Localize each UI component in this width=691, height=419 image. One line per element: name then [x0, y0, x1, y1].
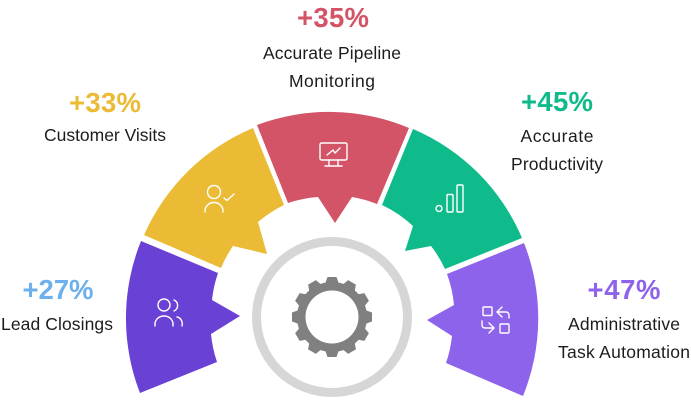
icon: automation swap — [482, 307, 509, 333]
segment: task automation — [427, 243, 538, 396]
stat: pipeline monitoring: Monitoring — [289, 71, 375, 91]
stat: customer visits — [44, 87, 166, 145]
stat: task automation: +47% — [588, 274, 660, 305]
icon: user check — [205, 186, 234, 212]
stat: task automation: Administrative — [568, 314, 680, 334]
segment: pipeline monitoring — [257, 112, 409, 223]
icon: users — [155, 299, 182, 326]
stat: productivity: Productivity — [511, 154, 603, 174]
stat: pipeline monitoring — [263, 2, 401, 91]
stat: lead closings: Lead Closings — [1, 314, 113, 334]
icon: monitor — [320, 143, 347, 166]
center ring — [256, 242, 408, 392]
gear icon — [292, 277, 372, 357]
stat: productivity — [511, 86, 603, 174]
stat: lead closings: +27% — [22, 274, 94, 305]
stat: lead closings — [1, 274, 113, 334]
stat: productivity: Accurate — [520, 126, 594, 146]
icon: bar signal — [436, 185, 463, 212]
stat: pipeline monitoring: +35% — [297, 2, 369, 33]
stat: customer visits: +33% — [69, 87, 141, 118]
segment: productivity — [382, 129, 522, 269]
segment: customer visits — [144, 128, 284, 268]
stat: productivity: +45% — [521, 86, 593, 117]
segment: lead closings — [126, 241, 240, 393]
stat: customer visits: Customer Visits — [44, 125, 166, 145]
stat: task automation: Task Automation — [558, 342, 690, 362]
stat: pipeline monitoring: Accurate Pipeline — [263, 43, 401, 63]
stat: task automation — [558, 274, 690, 362]
